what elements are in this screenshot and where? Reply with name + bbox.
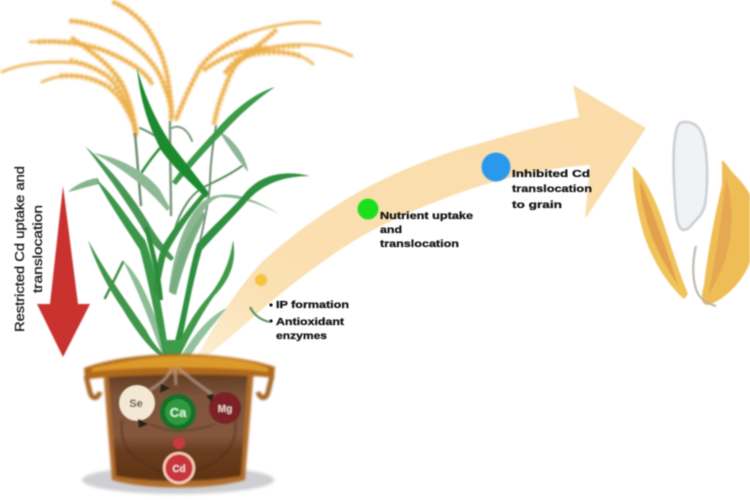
polished grain <box>674 122 707 230</box>
label: nutrient uptake and translocation <box>380 210 473 250</box>
green leaves <box>172 87 275 185</box>
transport arrowheads <box>138 384 214 428</box>
pot handles <box>86 376 100 398</box>
vertical label: restricted Cd uptake <box>12 166 45 332</box>
label: IP formation and antioxidant enzymes <box>269 299 349 342</box>
light leaves <box>93 153 170 211</box>
vertical label: restricted Cd uptake: Restricted Cd uptake and <box>12 166 27 332</box>
flow arrow from plant to grain <box>196 85 646 358</box>
thin stems <box>105 122 242 298</box>
small leaf tip by label <box>250 307 270 322</box>
roots <box>150 368 212 394</box>
yellow marker <box>255 274 267 286</box>
rice plant leaves <box>68 68 310 364</box>
soil <box>108 372 248 481</box>
pot body <box>103 368 254 488</box>
marker: Mg: Mg <box>218 404 232 415</box>
plant pot <box>82 354 275 494</box>
pot rim <box>84 354 275 380</box>
marker: Mg <box>209 392 241 424</box>
label: inhibited Cd translocation to grain: to grain <box>512 199 562 211</box>
green marker <box>358 198 378 220</box>
label: inhibited Cd translocation to grain <box>512 168 592 211</box>
darkest leaf <box>137 68 209 198</box>
label: inhibited Cd translocation to grain: Inhibited Cd <box>512 168 590 180</box>
small red dot between Ca and Cd <box>173 437 185 449</box>
label: IP formation and antioxidant enzymes: enzymes <box>276 330 327 342</box>
label: IP formation and antioxidant enzymes: IP formation <box>276 299 349 311</box>
marker: Se: Se <box>129 398 143 410</box>
panicles: rice grain heads <box>2 2 352 136</box>
label: nutrient uptake and translocation: and <box>380 224 402 236</box>
grain bumps <box>38 2 300 136</box>
label: nutrient uptake and translocation: Nutrient uptake <box>380 210 473 222</box>
left husk <box>633 166 688 299</box>
blue marker <box>482 152 510 182</box>
label: inhibited Cd translocation to grain: translocation <box>512 183 592 195</box>
vertical label: restricted Cd uptake: translocation <box>30 205 45 293</box>
red down arrow: restricted uptake <box>37 186 90 357</box>
rice grain and husks <box>633 122 750 306</box>
pot shadow <box>82 466 274 494</box>
marker: Ca: Ca <box>170 405 187 420</box>
marker: Cd: Cd <box>172 464 186 475</box>
right husk <box>702 160 750 305</box>
leaf base <box>162 340 186 364</box>
label: nutrient uptake and translocation: translocation <box>380 238 459 250</box>
marker: Cd <box>162 452 196 484</box>
marker: Ca <box>160 394 196 430</box>
label: IP formation and antioxidant enzymes: Antioxidant <box>276 316 345 328</box>
marker: Se <box>119 385 155 421</box>
